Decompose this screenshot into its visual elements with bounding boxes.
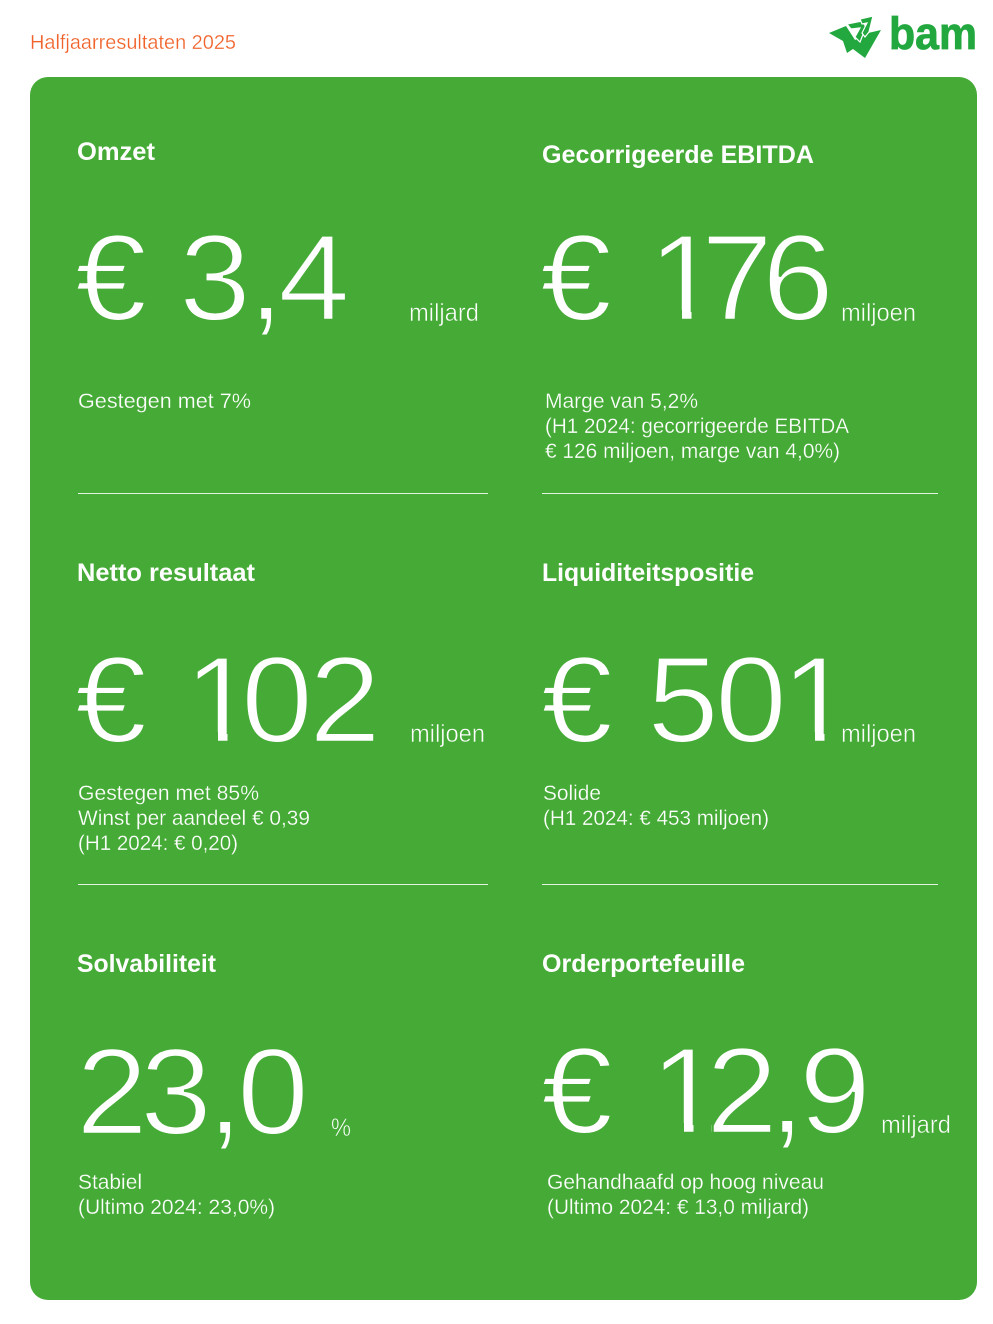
description [545,389,850,463]
big value [541,631,853,768]
big value: 12,9 [650,1022,871,1159]
description: (Ultimo 2024: 23,0%) [78,1195,275,1219]
big value: 176 [648,209,834,346]
description: Gestegen met 85% [78,781,259,805]
big value: 23,0 [76,1023,309,1160]
big value: € [541,631,613,768]
description: (H1 2024: gecorrigeerde EBITDA [545,414,850,438]
heading: Orderportefeuille [542,950,745,978]
big value [75,631,381,768]
description: Gestegen met 7% [78,389,251,413]
description: (H1 2024: € 0,20) [78,831,238,855]
big value: 501 [647,631,853,768]
unit: miljoen [841,720,916,748]
heading: Omzet [77,138,156,166]
heading: Solvabiliteit [77,950,217,978]
panel: orderportefeuille [541,950,951,1219]
big value: € [540,209,612,346]
heading: Gecorrigeerde EBITDA [542,141,814,169]
panel: gecorrigeerde EBITDA [540,141,916,463]
big value: 102 [184,631,381,768]
description [547,1170,824,1219]
description: € 126 miljoen, marge van 4,0%) [545,439,840,463]
description: Marge van 5,2% [545,389,698,413]
heading: Liquiditeitspositie [542,559,754,587]
description: Gehandhaafd op hoog niveau [547,1170,824,1194]
panel: solvabiliteit [76,950,351,1219]
unit: miljard [409,299,479,327]
description [78,1170,275,1219]
description: Winst per aandeel € 0,39 [78,806,310,830]
panel: netto resultaat [75,559,485,855]
big value: € [75,631,147,768]
big value: 3,4 [179,209,350,346]
description: Solide [543,781,601,805]
big value: € [75,209,147,346]
description: Stabiel [78,1170,142,1194]
logo: bam [829,8,977,59]
description [78,781,310,855]
icon: bam chevrons [829,16,881,58]
big value [540,209,834,346]
big value [75,209,350,346]
unit: miljoen [841,299,916,327]
heading: Netto resultaat [77,559,256,587]
unit: % [331,1114,351,1142]
description: (Ultimo 2024: € 13,0 miljard) [547,1195,809,1219]
unit: miljard [881,1111,951,1139]
description [543,781,769,830]
wordmark: bam [889,8,977,59]
big value [541,1022,871,1159]
title: Halfjaarresultaten 2025 [30,31,236,54]
description: (H1 2024: € 453 miljoen) [543,806,769,830]
big value: € [541,1022,613,1159]
unit: miljoen [410,720,485,748]
panel: liquiditeitspositie [541,559,916,830]
panel: omzet [75,138,479,413]
